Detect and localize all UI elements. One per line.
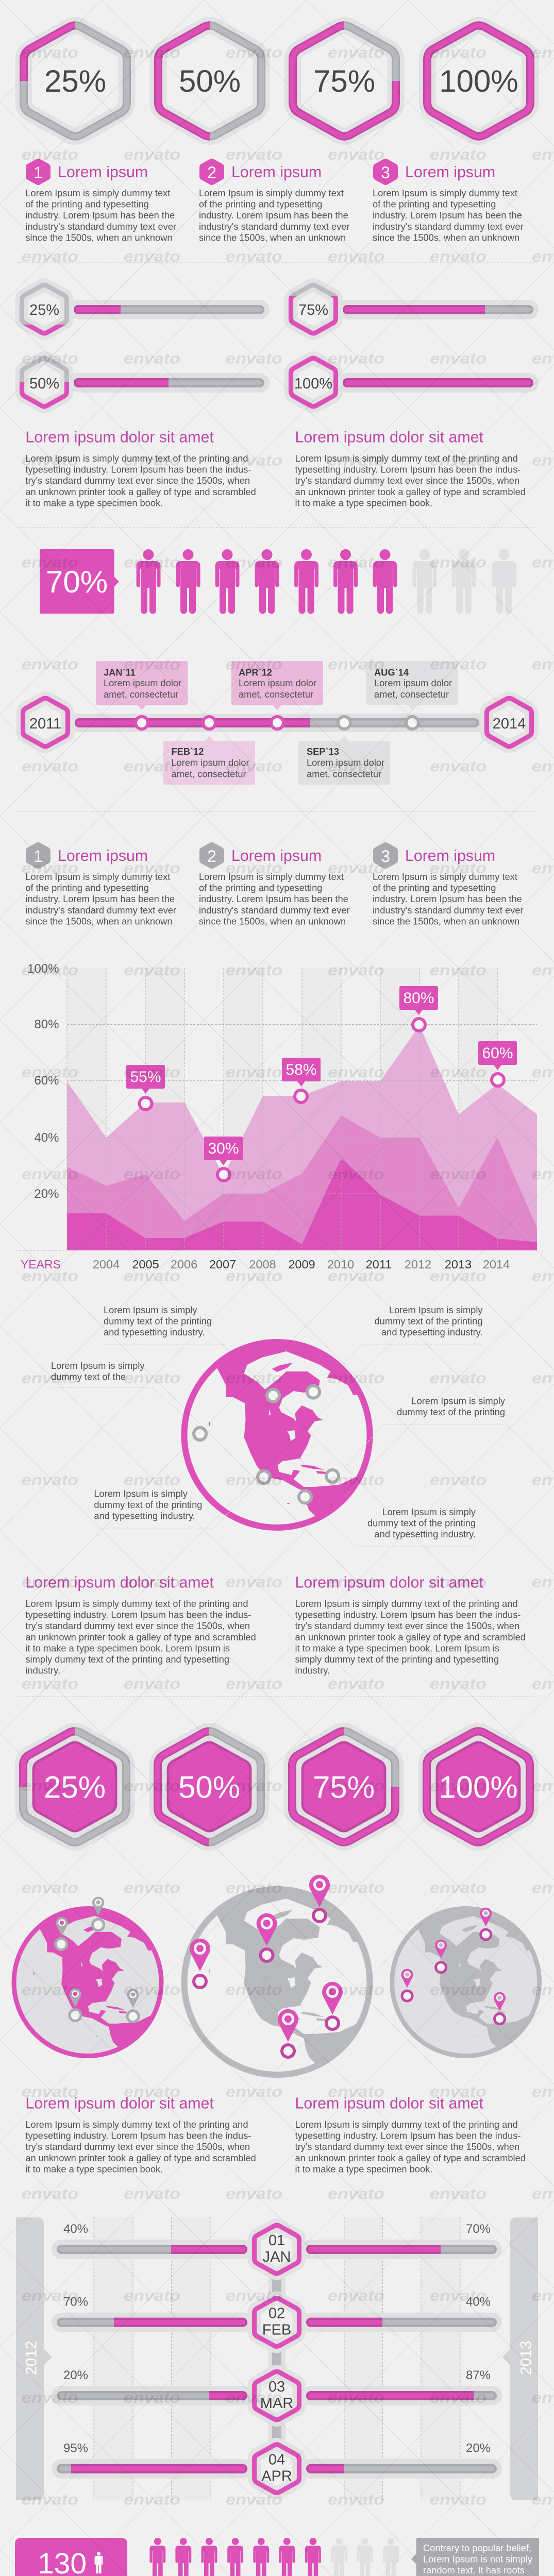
column 3: 3 [381, 847, 390, 866]
row 02 FEB: 40% [466, 2295, 491, 2309]
globe pink [14, 1896, 161, 2056]
column 2: Lorem Ipsum is simply dummy text [199, 188, 344, 198]
data marker 30% [204, 1137, 243, 1181]
callout FEB 12: amet, consectetur [171, 769, 246, 779]
callout AUG 14 [366, 661, 458, 710]
column 1: since the 1500s, when an unknown [25, 232, 173, 243]
filled hexagon 50%: 50% [178, 1770, 240, 1805]
filled hexagon 50% [158, 1731, 261, 1842]
column 2: industry's standard dummy text ever [199, 221, 350, 232]
row 03 MAR: 03 [268, 2379, 285, 2395]
callout AUG 14: amet, consectetur [374, 689, 449, 700]
annotation upper left: dummy text of the [51, 1371, 126, 1382]
column 2: industry. Lorem Ipsum has been the [199, 210, 348, 221]
text block left: it to make a type specimen book. [25, 497, 163, 508]
text block left: typesetting industry. Lorem Ipsum has been the indus- [25, 2130, 251, 2141]
annotation lower right: and typesetting industry. [375, 1529, 476, 1539]
column 2: of the printing and typesetting [199, 883, 322, 893]
text block right [295, 429, 526, 508]
callout SEP 13: Lorem ipsum dolor [307, 757, 384, 768]
column 2 [199, 160, 350, 243]
row 01 JAN: JAN [263, 2249, 291, 2265]
year tab 2013: 2013 [517, 2341, 535, 2375]
column 3: Lorem Ipsum is simply dummy text [373, 188, 517, 198]
x axis labels: 2007 [209, 1258, 236, 1271]
annotation lower right: dummy text of the printing [367, 1518, 476, 1529]
column 1: industry. Lorem Ipsum has been the [25, 210, 175, 221]
annotation top right: and typesetting industry. [381, 1327, 482, 1337]
column 2: 2 [207, 163, 216, 182]
data marker 60%: 60% [482, 1045, 513, 1062]
text block right [295, 1574, 526, 1676]
text block left: Lorem Ipsum is simply dummy text of the printing and [25, 2119, 248, 2130]
text block left: typesetting industry. Lorem Ipsum has been the indus- [25, 1609, 251, 1620]
column 2: Lorem ipsum [231, 164, 322, 181]
column 2: industry. Lorem Ipsum has been the [199, 893, 348, 904]
column 3 [373, 843, 524, 926]
text block right: typesetting industry. Lorem Ipsum has been the indus- [295, 1609, 521, 1620]
text block left [25, 429, 256, 508]
column 2: since the 1500s, when an unknown [199, 232, 346, 243]
column 2: since the 1500s, when an unknown [199, 916, 346, 926]
row 04 APR: 95% [63, 2442, 88, 2455]
row 02 FEB: 70% [63, 2295, 88, 2309]
y axis labels: 80% [34, 1018, 59, 1031]
x axis labels: YEARS [21, 1258, 61, 1271]
column 2 [199, 843, 350, 926]
column 2: of the printing and typesetting [199, 199, 322, 210]
progress bar 100%: 100% [294, 376, 332, 392]
panel: two long text blocks [25, 1574, 526, 1676]
row 03 MAR: 87% [466, 2368, 491, 2382]
hexagon ring 100%: 100% [439, 64, 518, 98]
callout JAN 11: Lorem ipsum dolor [104, 677, 181, 688]
row 04 APR: 20% [466, 2442, 491, 2455]
year tab 2012: 2012 [23, 2341, 40, 2375]
text block left: Lorem ipsum dolor sit amet [25, 1574, 214, 1591]
progress bar 75% [291, 285, 539, 333]
column 1: industry. Lorem Ipsum has been the [25, 893, 175, 904]
panel: filled percentage hexagons [23, 1731, 530, 1842]
row 02 FEB: 02 [268, 2306, 285, 2322]
text block left: simply dummy text of the printing and typesetting [25, 1654, 229, 1665]
row 01 JAN: 40% [63, 2222, 88, 2236]
row 03 MAR [52, 2368, 502, 2420]
panel: 70 percent people chart [40, 549, 516, 614]
data marker 80%: 80% [403, 990, 434, 1007]
column 1: of the printing and typesetting [25, 883, 149, 893]
text block right: Lorem Ipsum is simply dummy text of the printing and [295, 453, 518, 464]
data marker 80% [399, 986, 438, 1031]
text block left: Lorem Ipsum is simply dummy text of the printing and [25, 453, 248, 464]
column 2: 2 [207, 847, 216, 866]
area layers [67, 1026, 537, 1250]
text block left: try's standard dummy text ever since the 1500s, when [25, 1620, 250, 1631]
column 1: of the printing and typesetting [25, 199, 149, 210]
text block left [25, 1574, 256, 1676]
panel: progress bars with small hexagons [22, 285, 539, 406]
filled hexagon 100%: 100% [439, 1770, 518, 1805]
x axis labels: 2010 [327, 1258, 354, 1271]
hexagon ring 50%: 50% [179, 64, 241, 98]
filled hexagon 25% [23, 1731, 126, 1842]
y axis labels: 40% [34, 1131, 59, 1145]
text block left: an unknown printer took a galley of type and scrambled [25, 2153, 256, 2163]
y axis labels: 100% [27, 962, 59, 976]
text block left: try's standard dummy text ever since the 1500s, when [25, 2141, 250, 2152]
data marker 58%: 58% [286, 1061, 317, 1078]
text block right: industry. [295, 1665, 330, 1676]
text block left: it to make a type specimen book. [25, 2163, 163, 2174]
hexagon ring 75% [293, 25, 396, 137]
annotation upper right: dummy text of the printing [397, 1406, 505, 1417]
globe gray large [184, 1875, 370, 2075]
column 3: since the 1500s, when an unknown [373, 916, 519, 926]
row of inactive people icons [413, 549, 516, 614]
text block right: simply dummy text of the printing and typesetting [295, 1654, 499, 1665]
timeline track [72, 714, 482, 732]
column 3: industry. Lorem Ipsum has been the [373, 893, 522, 904]
column 3: industry. Lorem Ipsum has been the [373, 210, 522, 221]
column 3: industry's standard dummy text ever [373, 221, 524, 232]
data marker 55% [126, 1065, 165, 1110]
panel: globe with annotations [51, 1304, 506, 1546]
hexagon 2011: 2011 [29, 716, 61, 732]
text block right: it to make a type specimen book. [295, 2163, 432, 2174]
panel: monthly comparison bars [16, 2217, 538, 2500]
globe [184, 1341, 370, 1528]
background columns [94, 2217, 460, 2500]
globe markers [194, 1386, 339, 1503]
column 1: since the 1500s, when an unknown [25, 916, 173, 926]
annotation lower left: dummy text of the printing [94, 1499, 202, 1510]
x axis labels: 2009 [288, 1258, 315, 1271]
row 02 FEB [52, 2295, 502, 2346]
column 1: Lorem ipsum [58, 164, 148, 181]
text block right: Lorem ipsum dolor sit amet [295, 2095, 483, 2112]
hexagon 2014 [486, 698, 532, 747]
x axis labels: 2004 [93, 1258, 120, 1271]
column 2: Lorem Ipsum is simply dummy text [199, 871, 344, 882]
column 1: 1 [33, 163, 43, 182]
text block right: it to make a type specimen book. Lorem Ipsum is [295, 1642, 499, 1653]
timeline nodes [136, 717, 418, 729]
callout FEB 12: FEB`12 [171, 746, 204, 757]
text block right: Lorem ipsum dolor sit amet [295, 1574, 483, 1591]
text block right: an unknown printer took a galley of type and scrambled [295, 1632, 526, 1642]
text block right: Lorem Ipsum is simply dummy text of the printing and [295, 2119, 518, 2130]
globe gray small [392, 1907, 540, 2056]
column 2: Lorem ipsum [231, 848, 322, 865]
data marker 58% [282, 1058, 321, 1103]
text block left: it to make a type specimen book. Lorem Ipsum is [25, 1642, 230, 1653]
row 04 APR: 04 [268, 2452, 285, 2468]
text block left: an unknown printer took a galley of type and scrambled [25, 486, 256, 497]
column 1: industry's standard dummy text ever [25, 221, 176, 232]
x axis labels: 2011 [366, 1258, 392, 1271]
text block right: try's standard dummy text ever since the 1500s, when [295, 1620, 519, 1631]
row 02 FEB: FEB [262, 2322, 291, 2338]
callout APR 12 [231, 661, 323, 710]
panel: timeline [23, 661, 532, 785]
panel: two text blocks [25, 429, 526, 508]
progress bar 25% [22, 285, 270, 333]
panel: three globes with map pins [14, 1875, 540, 2075]
callout JAN 11: amet, consectetur [104, 689, 178, 700]
callout AUG 14: AUG`14 [374, 667, 409, 678]
panel: large percentage hexagon rings [24, 25, 530, 137]
callout APR 12: APR`12 [239, 667, 272, 678]
text block right: typesetting industry. Lorem Ipsum has been the indus- [295, 464, 521, 475]
text block right [295, 2095, 526, 2174]
x axis labels: 2014 [483, 1258, 510, 1271]
row 04 APR [52, 2442, 502, 2493]
column 1: Lorem ipsum [58, 848, 148, 865]
x axis labels: 2013 [445, 1258, 472, 1271]
gray note 1: Contrary to popular belief, [423, 2543, 531, 2553]
annotation top right: Lorem Ipsum is simply [389, 1304, 483, 1315]
callout APR 12: amet, consectetur [239, 689, 313, 700]
callout APR 12: Lorem ipsum dolor [239, 677, 316, 688]
progress bar 100% [291, 358, 539, 406]
text block left: Lorem ipsum dolor sit amet [25, 2095, 214, 2112]
column 3: of the printing and typesetting [373, 199, 496, 210]
progress bar 50% [22, 358, 270, 406]
hexagon ring 50% [158, 25, 261, 137]
row 03 MAR: MAR [260, 2395, 293, 2412]
column 1: 1 [33, 847, 43, 866]
row 01 JAN: 70% [466, 2222, 491, 2236]
text block left: typesetting industry. Lorem Ipsum has been the indus- [25, 464, 251, 475]
callout 70%: 70% [46, 565, 108, 599]
callout SEP 13 [298, 736, 390, 785]
connectors between hexagons [268, 2275, 286, 2444]
x axis labels: 2012 [405, 1258, 431, 1271]
text block left: Lorem Ipsum is simply dummy text of the printing and [25, 1598, 248, 1609]
y axis labels: 60% [34, 1074, 59, 1088]
row 01 JAN: 01 [268, 2232, 285, 2249]
text block right: it to make a type specimen book. [295, 497, 432, 508]
row 04 APR: APR [261, 2468, 292, 2485]
x axis labels: 2008 [249, 1258, 276, 1271]
column 3: Lorem ipsum [405, 164, 495, 181]
annotation upper right: Lorem Ipsum is simply [411, 1396, 506, 1406]
callout SEP 13: SEP`13 [307, 746, 339, 757]
filled hexagon 75%: 75% [313, 1770, 375, 1805]
leader lines [52, 1344, 503, 1546]
text block right: an unknown printer took a galley of type and scrambled [295, 2153, 526, 2163]
filled hexagon 100% [427, 1731, 530, 1842]
data marker 60% [478, 1041, 517, 1086]
annotation lower right: Lorem Ipsum is simply [382, 1506, 476, 1517]
callout JAN 11: JAN`11 [104, 667, 136, 678]
panel: people statistics [15, 2538, 539, 2576]
pink summary card [15, 2538, 136, 2576]
annotation top right: dummy text of the printing [375, 1316, 482, 1327]
callout FEB 12 [163, 736, 255, 785]
progress bar 25%: 25% [29, 302, 59, 318]
gray note 1: random text. It has roots [423, 2565, 525, 2575]
hexagon ring 25% [24, 25, 127, 137]
text block left [25, 2095, 256, 2174]
hexagon ring 100% [427, 25, 530, 137]
data marker 55%: 55% [130, 1069, 161, 1086]
hexagon 2011 [23, 698, 68, 747]
x axis labels: 2006 [171, 1258, 197, 1271]
year tab 2012 [16, 2217, 52, 2500]
row 03 MAR: 20% [63, 2368, 88, 2382]
column 3: industry's standard dummy text ever [373, 905, 524, 916]
column 1 [25, 843, 176, 926]
annotation top left: dummy text of the printing [104, 1316, 212, 1327]
column 2: industry's standard dummy text ever [199, 905, 350, 916]
column 1: industry's standard dummy text ever [25, 905, 176, 916]
column 1 [25, 160, 176, 243]
gray note 1 [411, 2538, 539, 2576]
hexagon 2014: 2014 [493, 716, 526, 732]
filled hexagon 25%: 25% [44, 1770, 106, 1805]
callout AUG 14: Lorem ipsum dolor [374, 677, 452, 688]
column 3: 3 [381, 163, 390, 182]
text block right: an unknown printer took a galley of type and scrambled [295, 486, 526, 497]
data marker 30%: 30% [208, 1140, 239, 1157]
column 1: Lorem Ipsum is simply dummy text [25, 871, 170, 882]
text block left: an unknown printer took a galley of type and scrambled [25, 1632, 256, 1642]
text block right: Lorem Ipsum is simply dummy text of the printing and [295, 1598, 518, 1609]
callout FEB 12: Lorem ipsum dolor [171, 757, 249, 768]
text block right: try's standard dummy text ever since the 1500s, when [295, 2141, 519, 2152]
gray note 1: Lorem Ipsum is not simply [423, 2553, 533, 2565]
column 3: of the printing and typesetting [373, 883, 496, 893]
text block left: try's standard dummy text ever since the 1500s, when [25, 475, 250, 486]
hexagon ring 75%: 75% [313, 64, 375, 98]
column 1: Lorem Ipsum is simply dummy text [25, 188, 170, 198]
text block right: try's standard dummy text ever since the 1500s, when [295, 475, 519, 486]
text block right: Lorem ipsum dolor sit amet [295, 429, 483, 446]
people row 1 [149, 2538, 399, 2576]
row 01 JAN [52, 2222, 502, 2274]
text block left: industry. [25, 1665, 60, 1676]
panel: numbered text columns, gray [25, 843, 524, 926]
x axis labels: 2005 [132, 1258, 159, 1271]
column 3 [373, 160, 524, 243]
annotation top left: Lorem Ipsum is simply [104, 1304, 197, 1315]
annotation lower left: Lorem Ipsum is simply [94, 1488, 188, 1499]
text block left: Lorem ipsum dolor sit amet [25, 429, 214, 446]
callout JAN 11 [96, 661, 188, 710]
y axis labels: 20% [34, 1187, 59, 1201]
column 3: Lorem Ipsum is simply dummy text [373, 871, 517, 882]
hexagon ring 25%: 25% [44, 64, 106, 98]
column 3: Lorem ipsum [405, 848, 495, 865]
panel: two text blocks under globes [25, 2095, 526, 2174]
row of people icons [137, 549, 397, 614]
annotation upper left: Lorem Ipsum is simply [51, 1360, 145, 1371]
annotation lower left: and typesetting industry. [94, 1511, 195, 1521]
area chart: pink [15, 962, 537, 1271]
year tab 2013 [502, 2217, 538, 2500]
callout SEP 13: amet, consectetur [307, 769, 381, 779]
column 3: since the 1500s, when an unknown [373, 232, 519, 243]
text block right: typesetting industry. Lorem Ipsum has been the indus- [295, 2130, 521, 2141]
annotation top left: and typesetting industry. [104, 1327, 205, 1337]
filled hexagon 75% [292, 1731, 395, 1842]
panel: numbered text columns, pink [25, 160, 524, 243]
callout 70% [40, 549, 119, 614]
x axis labels [21, 1258, 510, 1271]
y axis labels [27, 962, 59, 1201]
progress bar 50%: 50% [29, 376, 59, 392]
progress bar 75%: 75% [298, 302, 328, 318]
